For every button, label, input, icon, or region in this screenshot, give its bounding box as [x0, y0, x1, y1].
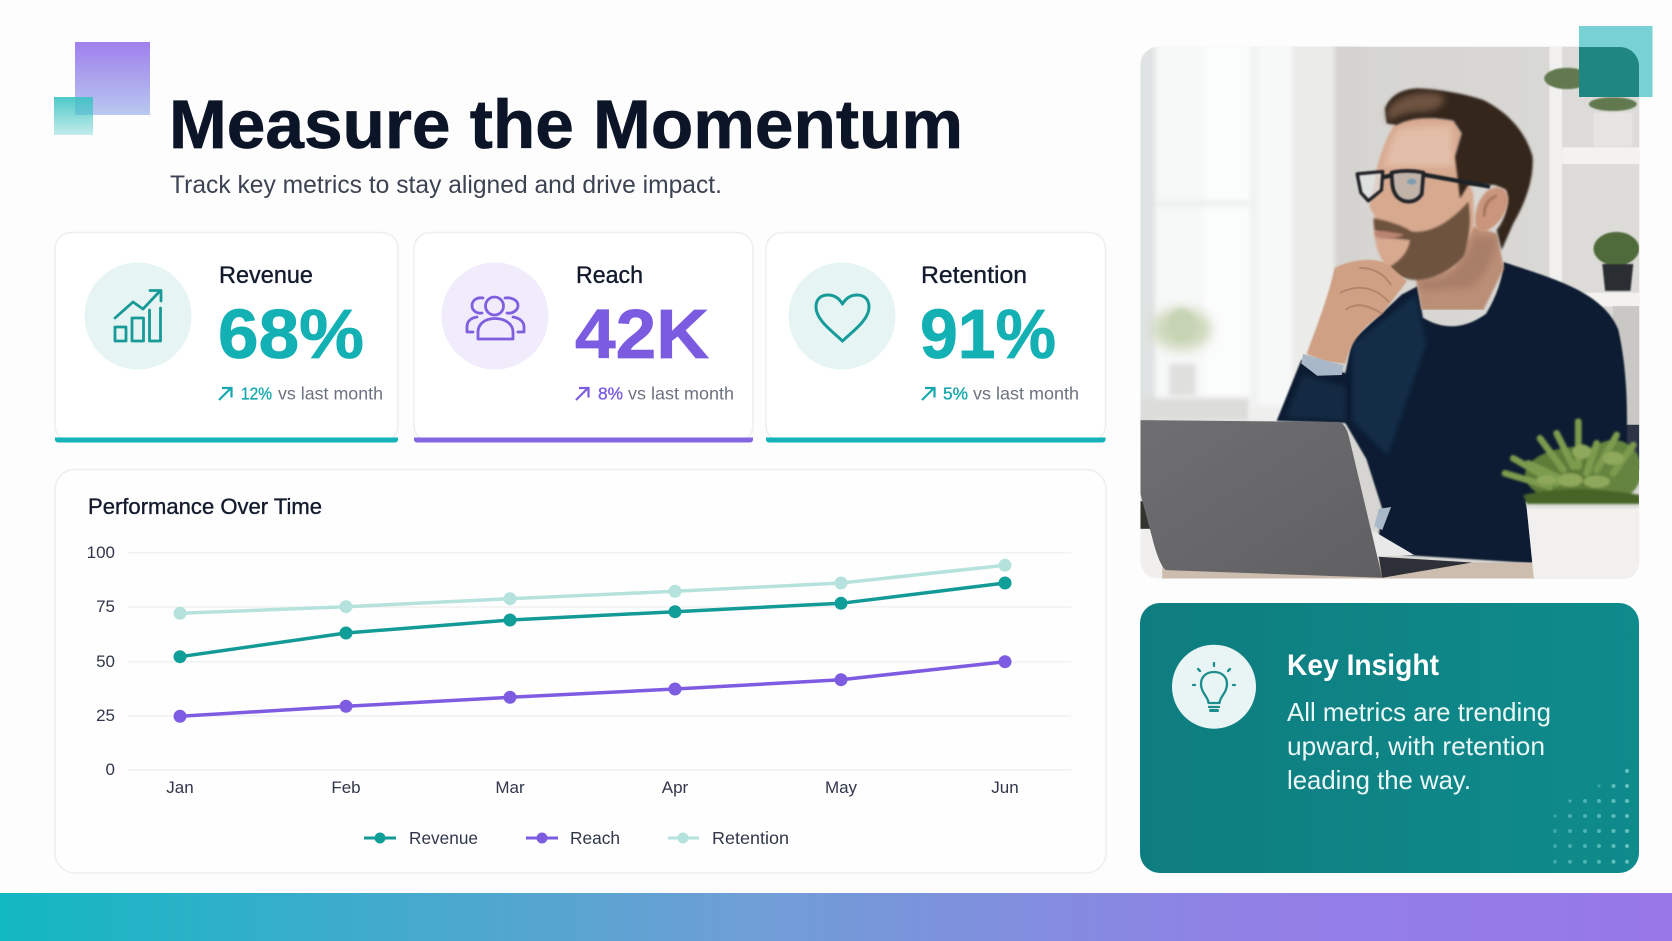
line: retention: [174, 559, 1012, 620]
retention delta: 5%: [943, 384, 968, 404]
x axis labels: [166, 778, 1019, 797]
man: cuffs: [1301, 354, 1344, 376]
chart legend: Revenue: [409, 828, 478, 848]
insight body: leading the way.: [1287, 765, 1471, 795]
title: Measure the Momentum: [169, 86, 963, 163]
reach delta: vs last month: [628, 384, 734, 404]
footer gradient band: [0, 893, 1672, 941]
reach value: 42K: [575, 295, 709, 373]
y axis labels: 25: [96, 706, 115, 725]
retention label: Retention: [921, 262, 1027, 289]
line: reach: [174, 655, 1012, 723]
decorative squares: title accent: [54, 42, 150, 135]
reach label: Reach: [576, 262, 643, 289]
paper: [1372, 530, 1414, 557]
man: head: [1354, 86, 1534, 310]
man: sweater: [1277, 262, 1627, 563]
chart legend: Retention: [712, 828, 789, 848]
x axis labels: Jan: [166, 778, 194, 797]
line: revenue: [174, 576, 1012, 663]
y axis labels: 0: [106, 760, 115, 779]
panel: key insight: [1140, 603, 1639, 873]
y axis labels: 50: [96, 652, 115, 671]
photo: thoughtful man at laptop: [1134, 38, 1642, 580]
x axis labels: May: [825, 778, 858, 797]
icon: light bulb: [1172, 645, 1256, 729]
x axis labels: Mar: [495, 778, 525, 797]
retention accent bar: [766, 438, 1106, 443]
revenue delta: [219, 384, 383, 404]
glasses: [1357, 171, 1490, 202]
chart heading: Performance Over Time: [88, 494, 322, 519]
panel: performance chart: [55, 470, 1106, 873]
revenue value: 68%: [218, 295, 364, 373]
beard: [1373, 202, 1470, 280]
revenue label: Revenue: [219, 262, 313, 289]
man: hand: [1307, 260, 1407, 364]
reach icon: [442, 262, 548, 370]
insight body: All metrics are trending: [1287, 697, 1551, 727]
face: [1369, 117, 1474, 278]
table: [1140, 528, 1162, 578]
potted plant: [1500, 417, 1639, 579]
chart legend: [364, 828, 789, 848]
x axis labels: Feb: [331, 778, 361, 797]
insight body: upward, with retention: [1287, 731, 1545, 761]
panel: reach card: [414, 232, 753, 443]
revenue icon: [84, 262, 192, 370]
revenue accent bar: [55, 438, 398, 443]
y axis labels: 75: [96, 597, 115, 616]
retention icon: [788, 262, 896, 370]
reach delta: [576, 384, 734, 404]
panel: retention card: [766, 232, 1106, 443]
x axis labels: Apr: [662, 778, 689, 797]
ear: [1475, 187, 1508, 231]
retention value: 91%: [920, 295, 1056, 373]
chart legend: Reach: [570, 828, 620, 848]
reach accent bar: [414, 438, 753, 443]
revenue delta: vs last month: [278, 384, 383, 404]
x axis labels: Jun: [991, 778, 1019, 797]
revenue delta: 12%: [241, 384, 272, 404]
hair: [1385, 88, 1533, 250]
retention delta: [922, 384, 1079, 404]
lips: [1375, 231, 1404, 239]
retention delta: vs last month: [973, 384, 1079, 404]
panel: revenue card: [55, 232, 398, 443]
insight heading: Key Insight: [1287, 649, 1439, 682]
insight body: [1287, 697, 1551, 795]
insight dots pattern: [1553, 769, 1629, 864]
neck: [1415, 227, 1504, 310]
y axis labels: 100: [87, 543, 115, 562]
decorative square: photo corner accent: [1579, 26, 1652, 97]
reach delta: 8%: [598, 384, 623, 404]
subtitle: Track key metrics to stay aligned and drive impact.: [170, 171, 722, 199]
laptop: [1140, 420, 1382, 578]
y axis labels: [87, 543, 115, 779]
